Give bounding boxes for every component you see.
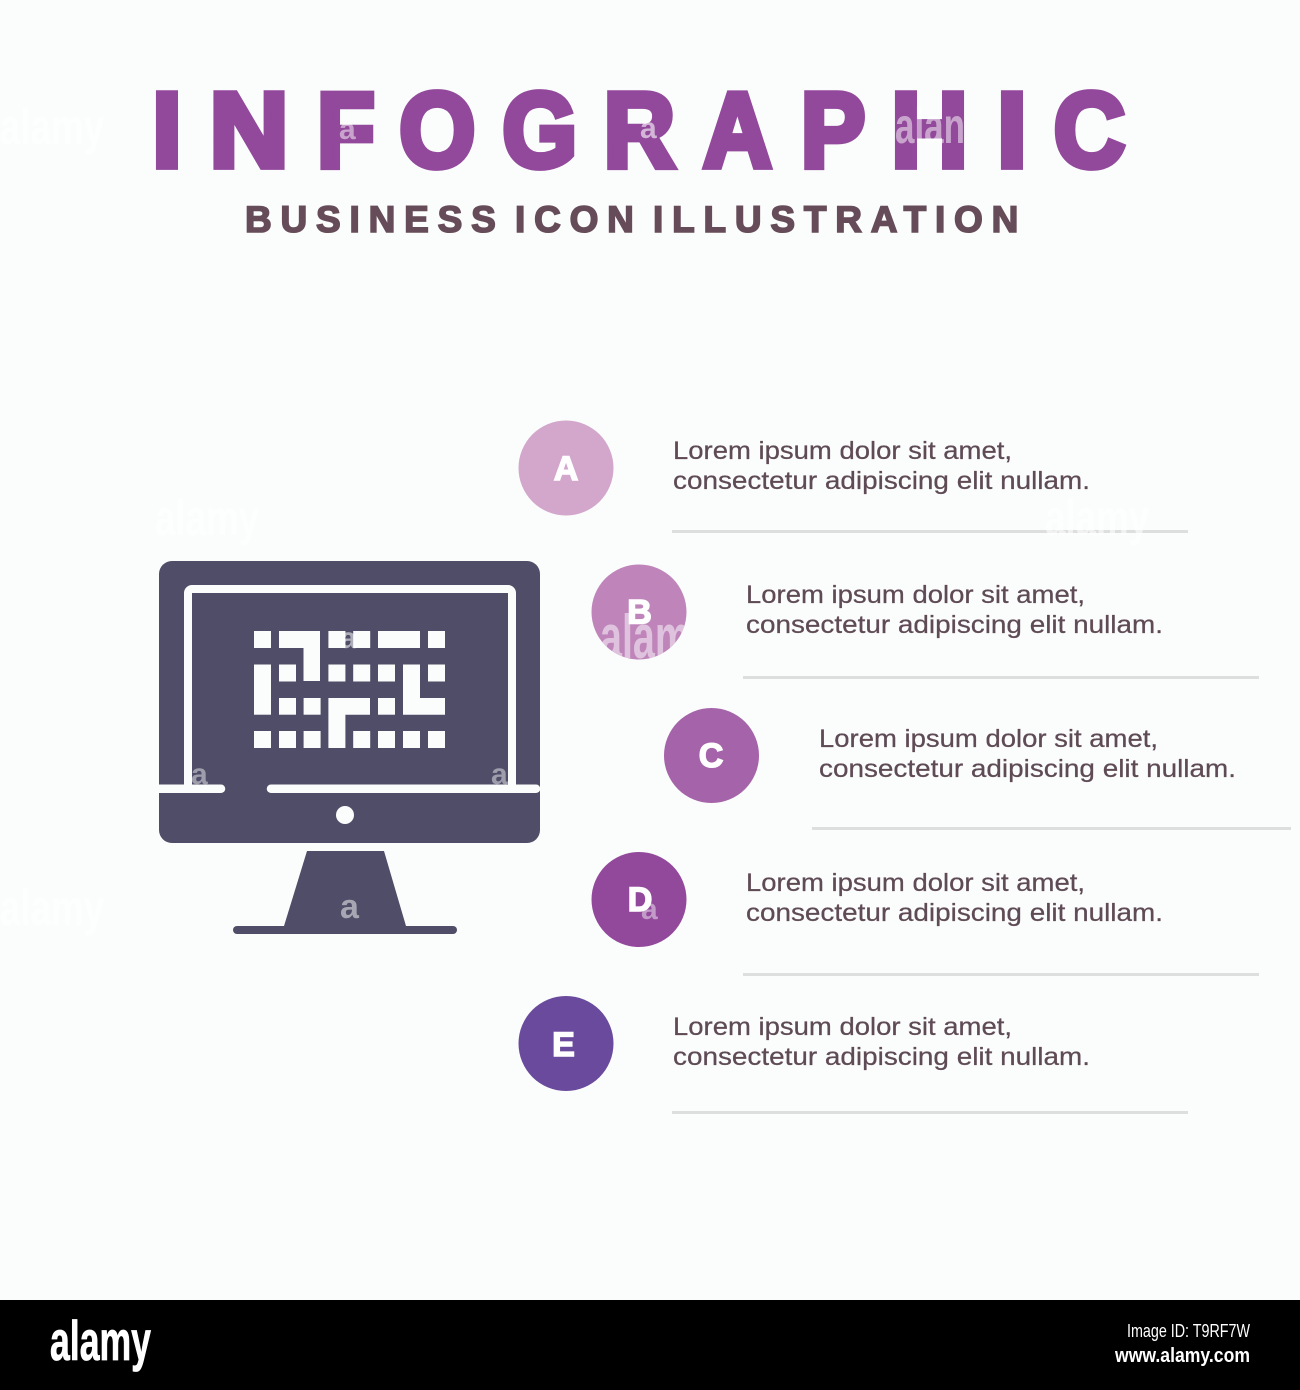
- letter B: B: [627, 594, 652, 632]
- circle C: [664, 708, 759, 803]
- rule B: [743, 676, 1259, 679]
- screen bottom edge left: [159, 784, 225, 793]
- footer logo: alamy: [50, 1309, 151, 1372]
- circle A: [518, 420, 614, 516]
- text D: Lorem ipsum dolor sit amet,: [746, 869, 1085, 897]
- subtitle: BUSINESS: [245, 199, 505, 240]
- watermarks: alam: [600, 603, 690, 672]
- watermarks: [192, 106, 1143, 920]
- watermarks: a: [339, 113, 356, 146]
- footer background: [0, 1300, 1300, 1390]
- rule E: [672, 1111, 1188, 1114]
- footer bar: [0, 1300, 1300, 1390]
- screen bottom edge right: [267, 784, 540, 793]
- power button: [336, 806, 354, 824]
- icon: computer monitor with crossword: [159, 561, 540, 934]
- title: I: [997, 72, 1027, 190]
- title: A: [703, 72, 772, 190]
- circle D: [592, 852, 686, 947]
- watermarks: alamy: [0, 880, 104, 936]
- watermarks: alamy: [1045, 490, 1149, 546]
- watermarks: a: [191, 758, 208, 791]
- image id: Image ID: T9RF7W: [1127, 1321, 1250, 1341]
- step E: [518, 996, 1188, 1114]
- step B: [592, 564, 1259, 679]
- title: R: [604, 72, 675, 190]
- text C: Lorem ipsum dolor sit amet,: [819, 725, 1158, 753]
- text D: consectetur adipiscing elit nullam.: [746, 899, 1163, 927]
- website: www.alamy.com: [1114, 1345, 1250, 1367]
- title: N: [210, 72, 288, 190]
- title: F: [317, 72, 375, 190]
- title: P: [801, 72, 865, 190]
- title: H: [891, 72, 968, 190]
- monitor stand: [284, 851, 406, 926]
- crossword grid: [254, 631, 445, 748]
- title: I: [152, 72, 182, 190]
- text C: consectetur adipiscing elit nullam.: [819, 755, 1236, 783]
- title: O: [399, 72, 475, 190]
- text B: Lorem ipsum dolor sit amet,: [746, 581, 1085, 609]
- screen outline: [188, 589, 512, 785]
- text A: Lorem ipsum dolor sit amet,: [673, 437, 1012, 465]
- step C: [664, 708, 1291, 830]
- subtitle: ICON: [515, 199, 643, 240]
- circle B: [592, 564, 686, 660]
- watermarks: a: [340, 622, 357, 655]
- watermarks: a: [640, 112, 657, 145]
- letter A: A: [554, 450, 578, 488]
- monitor body: [159, 561, 540, 843]
- text B: consectetur adipiscing elit nullam.: [746, 611, 1163, 639]
- watermarks: a: [641, 893, 658, 926]
- rule A: [672, 530, 1188, 533]
- rule C: [812, 827, 1291, 830]
- title: C: [1054, 72, 1125, 190]
- text E: consectetur adipiscing elit nullam.: [673, 1043, 1090, 1071]
- subtitle: ILLUSTRATION: [653, 199, 1027, 240]
- letter E: E: [552, 1026, 575, 1064]
- step A: [518, 420, 1188, 533]
- text A: consectetur adipiscing elit nullam.: [673, 467, 1090, 495]
- letter D: D: [628, 881, 652, 919]
- text E: Lorem ipsum dolor sit amet,: [673, 1013, 1012, 1041]
- step D: [592, 852, 1259, 976]
- watermarks: a: [340, 888, 360, 926]
- watermarks: a: [491, 758, 508, 791]
- watermarks: alamy: [0, 99, 104, 155]
- title: G: [502, 72, 577, 190]
- circle E: [518, 996, 614, 1091]
- letter C: C: [699, 737, 723, 775]
- watermarks: alan: [895, 98, 965, 154]
- rule D: [743, 973, 1259, 976]
- watermarks: alamy: [155, 490, 259, 546]
- monitor base: [233, 926, 457, 934]
